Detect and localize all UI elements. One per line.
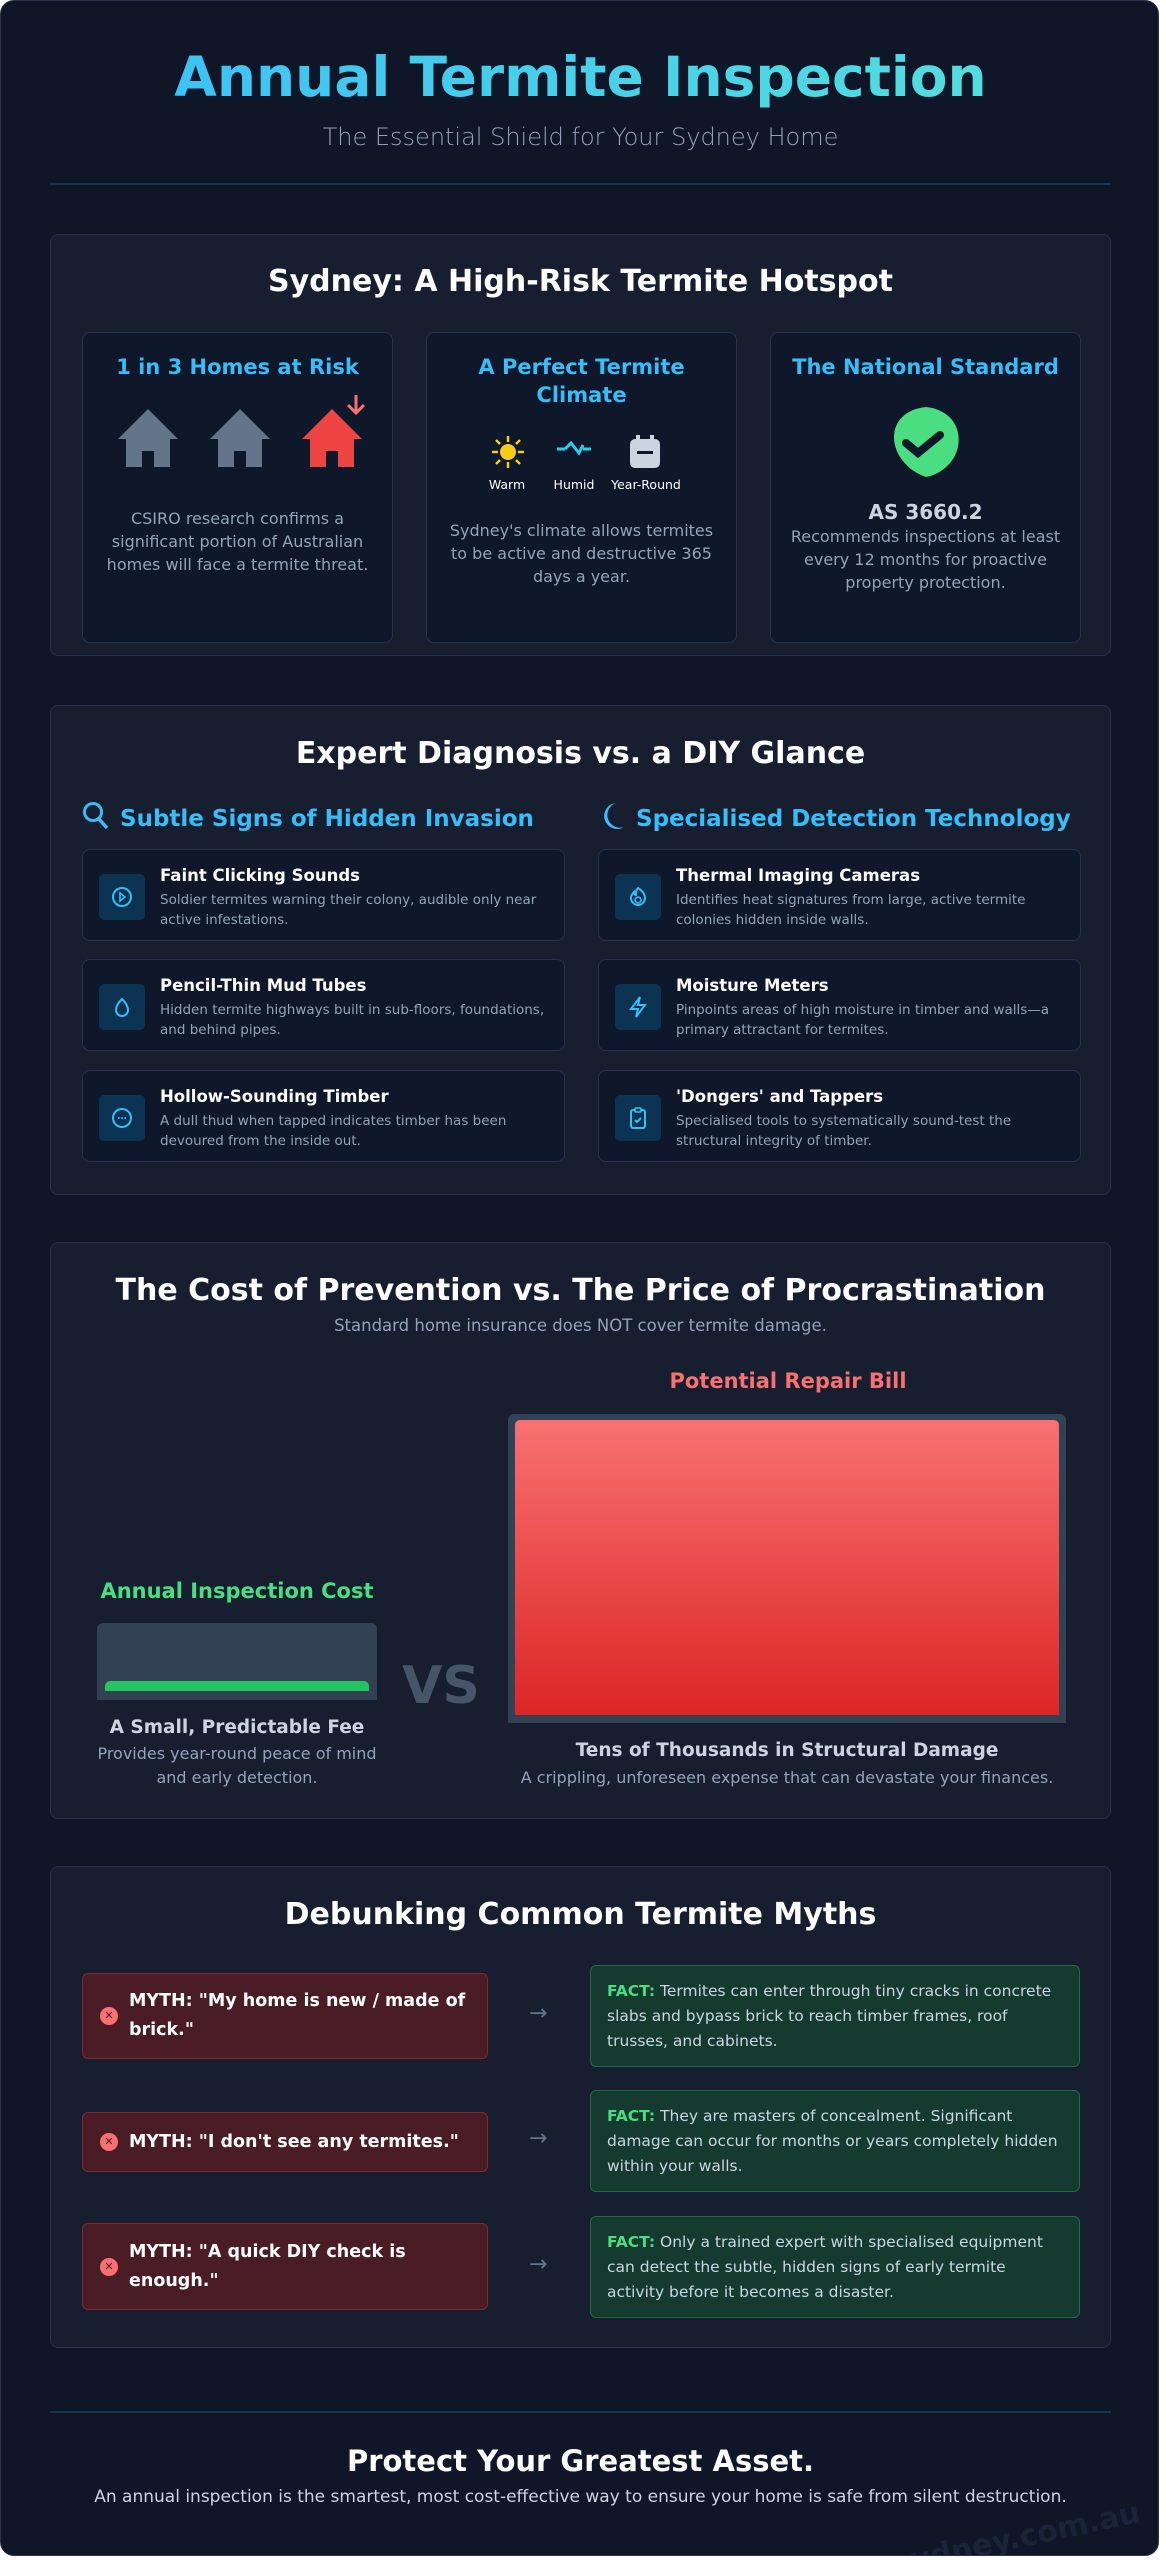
bar: repair [508, 1414, 1066, 1723]
icons: climate: Humid [554, 477, 594, 492]
label: repair bill: Potential Repair Bill [669, 1369, 907, 1393]
item: dongers [598, 1070, 1081, 1162]
item: thermal: Identifies heat signatures from large, active termite colonies hidden inside walls. [676, 892, 1025, 928]
card: national standard [770, 332, 1081, 643]
item: moisture: Pinpoints areas of high moisture in timber and walls—a primary attractant for termites. [676, 1002, 1049, 1038]
item: mud tubes: Hidden termite highways built in sub-floors, foundations, and behind pipes. [160, 1002, 544, 1038]
card: national standard: AS 3660.2 [868, 500, 983, 524]
myth 1: MYTH: "My home is new / made of brick." [129, 1991, 465, 2040]
subheading: insurance: Standard home insurance does NOT cover termite damage. [334, 1316, 827, 1335]
icon: houses [118, 395, 365, 467]
card: national standard: property protection. [845, 573, 1006, 592]
heading: hotspot: Sydney: A High-Risk Termite Hotspot [268, 264, 893, 299]
fact 1: FACT: Termites can enter through tiny cracks in concrete slabs and bypass brick to reach timber frames, roof trusses, and cabinets. [607, 1982, 1051, 2050]
card: national standard: Recommends inspections at least [791, 527, 1060, 546]
myth 3: MYTH: "A quick DIY check is enough." [129, 2242, 406, 2290]
card: 1 in 3 homes: CSIRO research confirms a [131, 509, 344, 528]
card: climate [426, 332, 737, 643]
title [1, 39, 1160, 115]
text: repair [520, 1740, 1053, 1787]
card: climate: Sydney's climate allows termites [450, 521, 713, 540]
panel: myths: → [529, 2252, 547, 2277]
card: 1 in 3 homes [82, 332, 393, 643]
text: repair: Tens of Thousands in Structural Damage [576, 1740, 998, 1761]
card: climate: Climate [536, 383, 627, 407]
title: Annual Termite Inspection [174, 45, 987, 109]
icons: climate [489, 435, 681, 492]
card: 1 in 3 homes: 1 in 3 Homes at Risk [116, 355, 359, 379]
item: clicking: Faint Clicking Sounds [160, 866, 360, 885]
myth 2: ✕ [104, 2135, 114, 2148]
fact 3 [590, 2216, 1080, 2318]
icons: climate: Warm [489, 477, 525, 492]
card: climate: to be active and destructive 365 [451, 544, 712, 563]
footer text: An annual inspection is the smartest, most cost-effective way to ensure your home is safe from silent destruction. [94, 2487, 1067, 2507]
item: clicking: Soldier termites warning their colony, audible only near active infestations. [160, 892, 536, 928]
panel: myths: → [529, 2001, 547, 2026]
icons: climate: Year-Round [611, 477, 681, 492]
bar: inspection [97, 1623, 377, 1700]
fact 2 [590, 2090, 1080, 2192]
card: 1 in 3 homes: significant portion of Australian [112, 532, 363, 551]
myth 3: ✕ [104, 2260, 114, 2272]
fact 1 [590, 1965, 1080, 2067]
fact 2: FACT: They are masters of concealment. Significant damage can occur for months or years completely hidden within your walls. [607, 2107, 1058, 2175]
panel: myths [50, 1866, 1111, 2348]
text: repair: A crippling, unforeseen expense that can devastate your finances. [521, 1768, 1053, 1787]
heading: expert: Expert Diagnosis vs. a DIY Glance [296, 736, 865, 771]
panel: Sydney hotspot [50, 234, 1111, 656]
text: fee [97, 1717, 377, 1787]
heading: cost: The Cost of Prevention vs. The Price of Procrastination [116, 1273, 1045, 1308]
text: fee: Provides year-round peace of mind [97, 1744, 377, 1763]
card: climate: A Perfect Termite [478, 355, 685, 379]
card: national standard: every 12 months for proactive [804, 550, 1047, 569]
panel: cost comparison [50, 1242, 1111, 1819]
card: climate: days a year. [533, 567, 630, 586]
myth 1 [82, 1973, 488, 2059]
footer heading: Protect Your Greatest Asset. [347, 2444, 814, 2478]
myth 1: ✕ [104, 2009, 114, 2022]
myth 2 [82, 2112, 488, 2172]
myth 3 [82, 2223, 488, 2310]
item: thermal [598, 849, 1081, 941]
item: clicking [82, 849, 565, 941]
card: national standard: The National Standard [792, 355, 1059, 379]
item: hollow timber: A dull thud when tapped indicates timber has been devoured from the inside out. [160, 1113, 506, 1149]
column heading: technology: Specialised Detection Technology [636, 806, 1071, 832]
item: moisture: Moisture Meters [676, 976, 829, 995]
column heading: signs: Subtle Signs of Hidden Invasion [120, 806, 534, 832]
fact 3: FACT: Only a trained expert with specialised equipment can detect the subtle, hidden signs of early termite activity before it becomes a disaster. [607, 2233, 1043, 2301]
panel: myths: → [529, 2126, 547, 2151]
icon: shield [894, 407, 959, 477]
item: dongers: Specialised tools to systematically sound-test the structural integrity of timber. [676, 1113, 1011, 1149]
text: VS: VS [402, 1656, 480, 1716]
card: 1 in 3 homes: homes will face a termite threat. [107, 555, 368, 574]
item: thermal: Thermal Imaging Cameras [676, 866, 920, 885]
text: fee: and early detection. [156, 1768, 318, 1787]
item: dongers: 'Dongers' and Tappers [676, 1087, 883, 1106]
panel: expert vs DIY [50, 705, 1111, 1195]
label: inspection cost: Annual Inspection Cost [100, 1579, 374, 1603]
item: mud tubes [82, 959, 565, 1051]
item: hollow timber [82, 1070, 565, 1162]
item: mud tubes: Pencil-Thin Mud Tubes [160, 976, 366, 995]
myth 2: MYTH: "I don't see any termites." [129, 2132, 459, 2152]
text: fee: A Small, Predictable Fee [110, 1717, 364, 1738]
item: moisture [598, 959, 1081, 1051]
heading: myths: Debunking Common Termite Myths [285, 1897, 876, 1932]
item: hollow timber: Hollow-Sounding Timber [160, 1087, 389, 1106]
subtitle: The Essential Shield for Your Sydney Home [323, 123, 838, 151]
